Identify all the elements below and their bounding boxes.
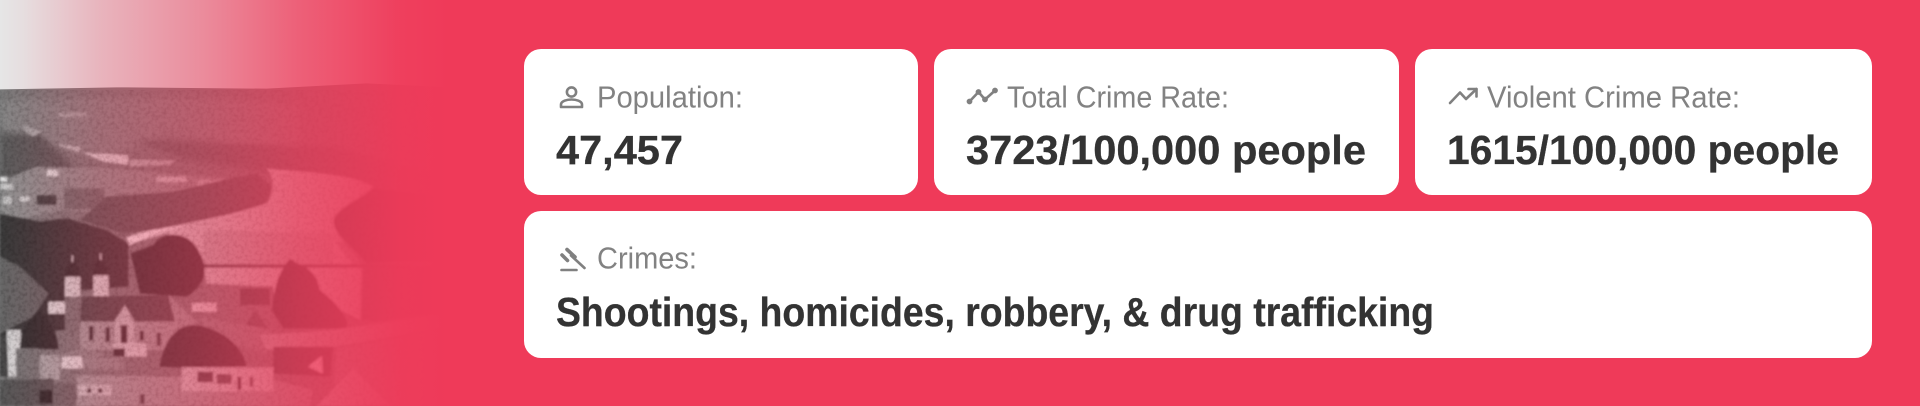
- town: [0, 167, 230, 220]
- church: [65, 297, 80, 333]
- icon: person: [561, 87, 582, 107]
- shore buildings: [203, 283, 273, 320]
- right bank: [333, 188, 440, 263]
- value: total crime rate: 3723/100,000 people: [966, 127, 1366, 173]
- card: violent crime rate: [1415, 49, 1872, 195]
- card: crimes: [524, 211, 1872, 358]
- bridge: [203, 230, 333, 263]
- icon: gavel: [562, 250, 584, 270]
- river: [127, 168, 373, 320]
- wooded bank: [80, 173, 272, 233]
- value: population: 47,457: [556, 127, 683, 173]
- label: violent crime rate: Violent Crime Rate:: [1487, 80, 1740, 114]
- label: population: Population:: [597, 80, 743, 114]
- icon: line chart: [968, 89, 997, 103]
- label: total crime rate: Total Crime Rate:: [1007, 80, 1229, 114]
- foreground houses: [160, 325, 247, 368]
- value: violent crime rate: 1615/100,000 people: [1447, 127, 1839, 173]
- card: total crime rate: [934, 49, 1399, 195]
- card: population: [524, 49, 918, 195]
- photo: river town with gradient fade: [0, 0, 467, 406]
- label: crimes: Crimes:: [597, 240, 697, 276]
- dark trees: [0, 213, 128, 367]
- value: crimes: Shootings, homicides, robbery, & drug trafficking: [556, 289, 1434, 335]
- icon: trending up arrow: [1450, 89, 1476, 103]
